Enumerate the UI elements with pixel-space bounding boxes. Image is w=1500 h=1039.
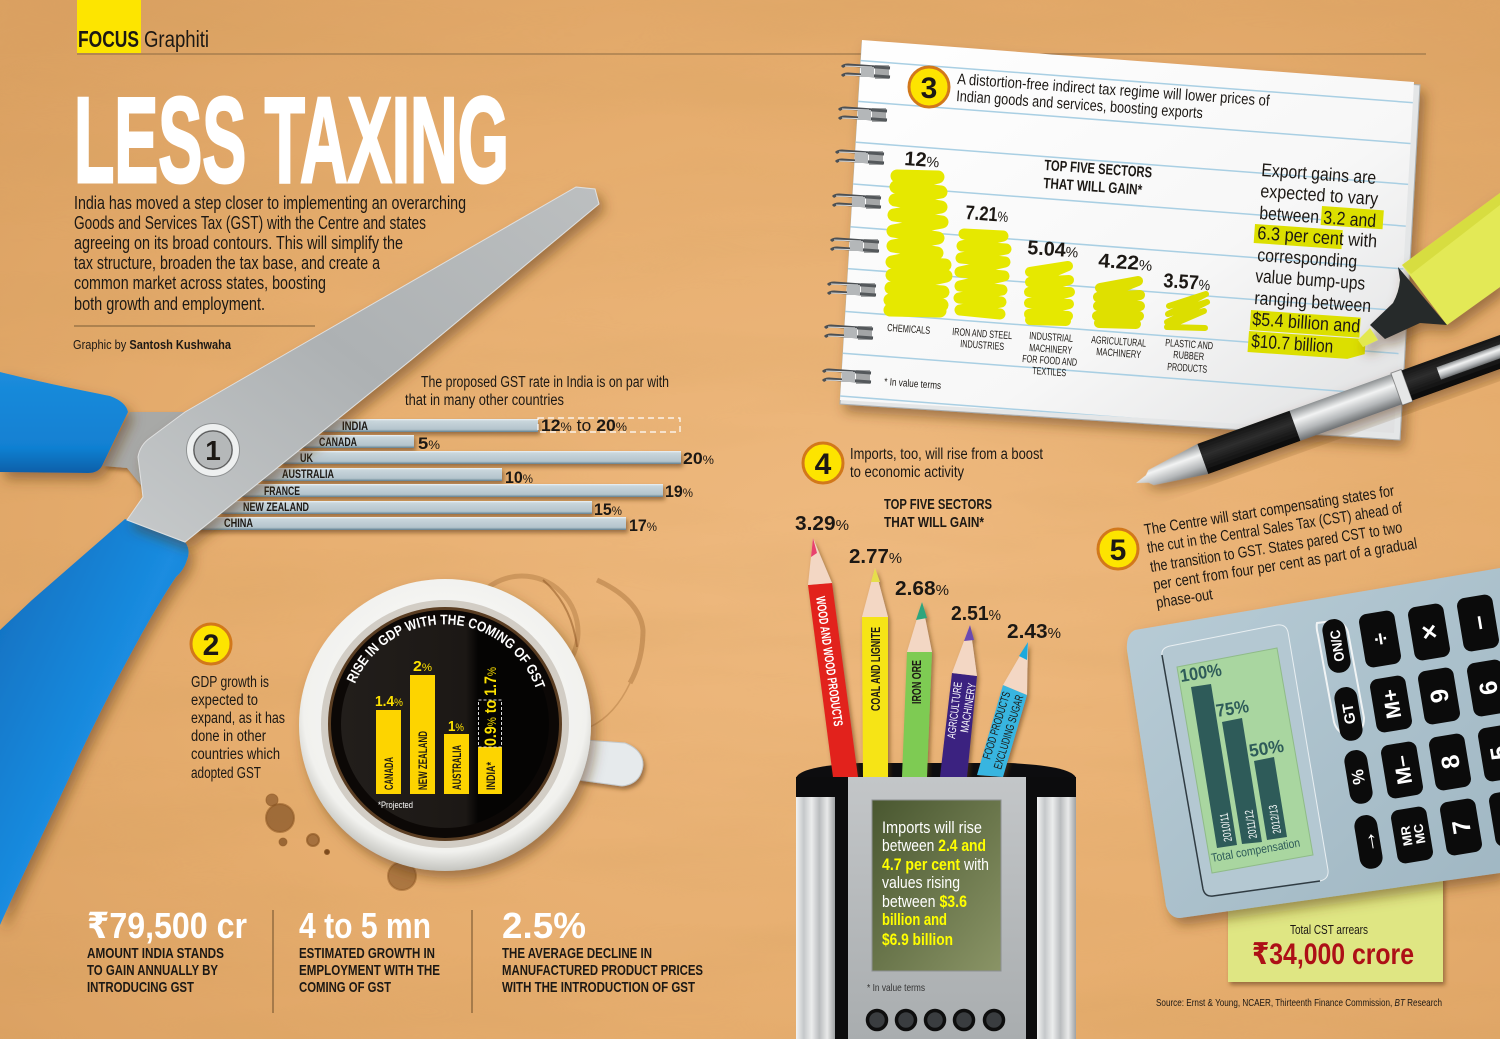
GDP bar chart: 2% bbox=[413, 658, 432, 675]
pivot screw with number 1: 1 bbox=[205, 435, 221, 466]
header: section label: Graphiti bbox=[144, 26, 209, 52]
notebook heading text: A distortion-free indirect tax regime will lower prices of bbox=[957, 71, 1271, 110]
pencil values: 2.43% bbox=[1007, 621, 1061, 643]
source line: Source: Ernst & Young, NCAER, Thirteenth Finance Commission, BT Research bbox=[1156, 997, 1442, 1009]
title: LESS TAXING bbox=[74, 72, 509, 208]
GDP explanatory text: done in other bbox=[191, 728, 266, 745]
GDP bar chart: 1.4% bbox=[375, 693, 403, 710]
calculator LCD chart: 75% bbox=[1214, 696, 1250, 721]
calculator keys: % bbox=[1348, 768, 1369, 786]
bar values: 7.21% bbox=[965, 202, 1009, 227]
GDP bar chart: CANADA bbox=[382, 757, 396, 790]
header: section label bbox=[77, 0, 1426, 54]
holder buttons bbox=[868, 1010, 1004, 1030]
calculator keys: MR bbox=[1397, 824, 1416, 847]
sector labels: PRODUCTS bbox=[1167, 361, 1208, 376]
stat: 79,500 crore: TO GAIN ANNUALLY BY bbox=[87, 962, 218, 979]
sector labels: FOR FOOD AND bbox=[1022, 353, 1078, 369]
export gains callout: 6.3 per cent with bbox=[1257, 222, 1378, 251]
number badge 4: 4 bbox=[815, 448, 832, 481]
intro text block: India has moved a step closer to implementing an overarching bbox=[74, 193, 466, 213]
panel 4: imports: EXCLUDING SUGAR bbox=[992, 694, 1026, 771]
bar values: 5% bbox=[418, 434, 440, 453]
bar values: 4.22% bbox=[1098, 250, 1153, 276]
number badge 3 bbox=[909, 67, 949, 107]
sector labels: INDUSTRIES bbox=[960, 338, 1005, 353]
calculator bbox=[1127, 568, 1500, 918]
bar values: 12% to 20% bbox=[541, 416, 627, 435]
panel 4: imports: AGRICULTURE bbox=[946, 681, 965, 739]
calculator keys: ÷ bbox=[1367, 631, 1394, 647]
GDP explanatory text bbox=[191, 674, 285, 782]
CST text bbox=[1143, 483, 1418, 612]
intro text block: common market across states, boosting bbox=[74, 273, 326, 293]
pencil labels: IRON ORE bbox=[909, 660, 924, 704]
export gains callout: corresponding bbox=[1257, 244, 1358, 272]
chart intro text: that in many other countries bbox=[405, 392, 564, 409]
key statistics row bbox=[87, 905, 703, 1013]
bar values: 5.04% bbox=[1027, 237, 1079, 263]
bar values: 19% bbox=[665, 482, 693, 501]
imports text: Imports, too, will rise from a boost bbox=[850, 446, 1044, 463]
stat: 79,500 crore: AMOUNT INDIA STANDS bbox=[87, 945, 224, 962]
sector labels: AGRICULTURAL bbox=[1091, 334, 1147, 350]
intro text block bbox=[74, 193, 466, 314]
stat: 2.5 percent bbox=[502, 905, 703, 996]
chart heading bbox=[1043, 157, 1153, 199]
chart heading: THAT WILL GAIN* bbox=[1043, 175, 1143, 199]
number badge 5: 5 bbox=[1110, 534, 1126, 567]
GDP bar chart: INDIA* bbox=[484, 762, 498, 790]
export gains callout: expected to vary bbox=[1260, 180, 1380, 209]
calculator LCD chart: 100% bbox=[1178, 660, 1223, 686]
country labels: INDIA bbox=[342, 421, 368, 433]
number badge 2: 2 bbox=[203, 629, 219, 662]
calculator keys: GT bbox=[1339, 702, 1360, 725]
GDP bar chart: 1% bbox=[448, 718, 464, 735]
holder footnote: * In value terms bbox=[867, 982, 925, 994]
imports chart heading: THAT WILL GAIN* bbox=[884, 514, 984, 531]
GDP bar chart: AUSTRALIA bbox=[450, 745, 464, 790]
calculator display bezel bbox=[1162, 625, 1328, 896]
GDP explanatory text: GDP growth is bbox=[191, 674, 269, 691]
chart intro text: The proposed GST rate in India is on par with bbox=[421, 374, 669, 391]
stat: 4 to 5 million bbox=[299, 905, 440, 996]
holder screen text: Imports will rise bbox=[882, 819, 982, 837]
notebook pages bbox=[840, 40, 1430, 441]
sticky note: ₹34,000 crore bbox=[1252, 938, 1414, 971]
calculator keys: M+ bbox=[1379, 687, 1406, 720]
intro text block: agreeing on its broad contours. This will simplify the bbox=[74, 233, 403, 253]
coffee stains bbox=[266, 576, 643, 890]
stat: 4 to 5 million: ESTIMATED GROWTH IN bbox=[299, 945, 435, 962]
pencil labels: WOOD AND WOOD PRODUCTS bbox=[813, 595, 846, 727]
country labels: CHINA bbox=[224, 518, 253, 530]
stat: 4 to 5 million: EMPLOYMENT WITH THE bbox=[299, 962, 440, 979]
sticky note bbox=[1228, 870, 1443, 982]
sector labels: IRON AND STEEL bbox=[952, 326, 1013, 342]
holder screen text: values rising bbox=[882, 874, 960, 892]
panel 1: GST rates bar chart with scissors bbox=[0, 187, 714, 925]
stat: 4 to 5 million: COMING OF GST bbox=[299, 979, 391, 996]
pen holder bbox=[796, 777, 1076, 1039]
pen holder back rim bbox=[796, 763, 1076, 800]
GDP bar chart: 0.9% to 1.7% bbox=[481, 667, 500, 746]
CST text: the transition to GST. States pared CST to two bbox=[1149, 519, 1403, 576]
GDP explanatory text: expand, as it has bbox=[191, 710, 285, 727]
imports text: to economic activity bbox=[850, 464, 964, 481]
bar values: 3.57% bbox=[1163, 270, 1211, 295]
GDP explanatory text: adopted GST bbox=[191, 765, 261, 782]
export gains callout: $5.4 billion and bbox=[1252, 308, 1361, 337]
imports chart heading: TOP FIVE SECTORS bbox=[884, 496, 992, 513]
highlighter bars bbox=[890, 176, 1207, 328]
sector labels: RUBBER bbox=[1173, 349, 1205, 363]
export gains callout: $10.7 billion bbox=[1251, 330, 1334, 357]
intro text block: Goods and Services Tax (GST) with the Centre and states bbox=[74, 213, 426, 233]
holder screen text: $6.9 billion bbox=[882, 931, 953, 949]
header: section label: FOCUS bbox=[78, 26, 139, 52]
panel 4: imports bbox=[795, 443, 1076, 1039]
intro text block: tax structure, broaden the tax base, and create a bbox=[74, 253, 381, 273]
calculator keys: 9 bbox=[1425, 687, 1455, 705]
dashed projection for India range bbox=[538, 418, 680, 432]
calculator keys: 8 bbox=[1436, 753, 1466, 771]
GDP bar chart bbox=[375, 658, 502, 811]
country labels: CANADA bbox=[319, 437, 357, 449]
imports chart heading bbox=[884, 496, 992, 531]
intro text block: both growth and employment. bbox=[74, 294, 265, 314]
pencils bbox=[808, 538, 1028, 777]
pencil values: 2.68% bbox=[895, 578, 949, 600]
steel bars bbox=[195, 419, 681, 530]
calculator LCD chart: 2012/13 bbox=[1268, 804, 1284, 834]
notebook heading text: Indian goods and services, boosting exports bbox=[956, 88, 1203, 122]
pencil values bbox=[795, 513, 1061, 643]
calculator LCD chart bbox=[1177, 648, 1313, 873]
GDP bar chart: *Projected bbox=[378, 800, 413, 811]
panel 4: imports: MACHINERY bbox=[959, 682, 979, 733]
GDP explanatory text: expected to bbox=[191, 692, 258, 709]
bar values: 12% bbox=[904, 148, 940, 172]
calculator keys: – bbox=[1462, 613, 1494, 633]
byline: Graphic by Santosh Kushwaha bbox=[73, 337, 232, 352]
holder screen text: 4.7 per cent with bbox=[882, 856, 989, 874]
stat: 2.5 percent: WITH THE INTRODUCTION OF GST bbox=[502, 979, 695, 996]
stat: 79,500 crore bbox=[87, 905, 247, 996]
holder screen text bbox=[882, 819, 989, 949]
stat: 2.5 percent: MANUFACTURED PRODUCT PRICES bbox=[502, 962, 703, 979]
calculator keys: ON/C bbox=[1326, 629, 1347, 663]
pencil values: 2.51% bbox=[951, 603, 1001, 625]
CST text: The Centre will start compensating states for bbox=[1143, 483, 1396, 539]
chart intro text bbox=[405, 374, 669, 409]
scissors bbox=[0, 187, 599, 925]
CST text: phase-out bbox=[1155, 586, 1214, 612]
curved chart heading: RISE IN GDP WITH THE COMING OF GST bbox=[346, 614, 546, 688]
pencil labels bbox=[813, 595, 924, 727]
sector labels: PLASTIC AND bbox=[1165, 337, 1214, 352]
country labels bbox=[224, 421, 368, 530]
sector labels: * In value terms bbox=[884, 376, 941, 392]
bar values bbox=[418, 416, 714, 535]
calculator keys: → bbox=[1353, 828, 1384, 856]
icon: highlighter pen bbox=[1358, 193, 1500, 347]
chart heading: TOP FIVE SECTORS bbox=[1044, 157, 1153, 182]
export gains callout bbox=[1248, 159, 1384, 360]
CST text: per cent from four per cent as part of a gradual bbox=[1152, 535, 1418, 594]
holder screen text: billion and bbox=[882, 911, 947, 929]
bar values bbox=[904, 148, 1211, 295]
calculator LCD chart: 2010/11 bbox=[1219, 812, 1235, 842]
stat: 79,500 crore: ₹79,500 cr bbox=[87, 905, 247, 946]
stat: 2.5 percent: 2.5% bbox=[502, 905, 586, 946]
number badge 4 bbox=[803, 443, 843, 483]
export gains callout: value bump-ups bbox=[1255, 265, 1366, 294]
calculator keys: M– bbox=[1390, 753, 1417, 786]
stat: 79,500 crore: INTRODUCING GST bbox=[87, 979, 194, 996]
bar values: 20% bbox=[683, 449, 714, 468]
sector labels bbox=[884, 322, 1214, 392]
calculator LCD chart: 50% bbox=[1247, 736, 1285, 761]
calculator keys bbox=[1317, 593, 1500, 871]
panel 3: notebook of exports bbox=[823, 40, 1500, 441]
country labels: AUSTRALIA bbox=[282, 469, 334, 481]
calculator LCD chart: 2011/12 bbox=[1244, 809, 1260, 839]
stat: 4 to 5 million: 4 to 5 mn bbox=[299, 905, 431, 946]
holder screen text: between $3.6 bbox=[882, 893, 967, 911]
country labels: UK bbox=[300, 453, 314, 465]
panel 4: imports: FOOD PRODUCTS bbox=[981, 690, 1013, 761]
export gains callout: between 3.2 and bbox=[1259, 202, 1377, 231]
export gains callout: ranging between bbox=[1254, 287, 1372, 316]
sector labels: CHEMICALS bbox=[887, 322, 931, 337]
panel 5: CST compensation bbox=[1098, 483, 1500, 982]
country labels: NEW ZEALAND bbox=[243, 502, 309, 514]
calculator keys: MC bbox=[1410, 822, 1428, 845]
country labels: FRANCE bbox=[264, 486, 300, 498]
pencil labels: COAL AND LIGNITE bbox=[868, 627, 883, 711]
sector labels: TEXTILES bbox=[1032, 365, 1067, 379]
pivot screw with number 1 bbox=[186, 423, 240, 477]
number badge 5 bbox=[1098, 529, 1138, 569]
sticky note: Total CST arrears bbox=[1290, 923, 1368, 937]
export gains callout: Export gains are bbox=[1261, 159, 1377, 188]
spiral binding bbox=[823, 65, 890, 384]
sector labels: MACHINERY bbox=[1029, 342, 1073, 357]
pencil values: 2.77% bbox=[849, 546, 902, 568]
stat: 2.5 percent: THE AVERAGE DECLINE IN bbox=[502, 945, 652, 962]
GDP bar chart: NEW ZEALAND bbox=[416, 731, 430, 790]
icon: ballpoint pen bbox=[1130, 325, 1500, 499]
panel 2: GDP growth bbox=[190, 574, 648, 891]
calculator LCD chart: Total compensation bbox=[1210, 836, 1301, 865]
sector labels: INDUSTRIAL bbox=[1029, 330, 1074, 345]
number badge 2 bbox=[191, 624, 231, 664]
imports text bbox=[850, 446, 1044, 481]
holder screen text: between 2.4 and bbox=[882, 837, 986, 855]
coffee cup with handle bbox=[299, 579, 643, 871]
bar values: 17% bbox=[629, 516, 657, 535]
sector labels: MACHINERY bbox=[1096, 346, 1142, 361]
bar values: 10% bbox=[505, 468, 533, 487]
GDP explanatory text: countries which bbox=[191, 746, 280, 763]
bar values: 15% bbox=[594, 500, 622, 519]
calculator keys: × bbox=[1413, 622, 1445, 642]
number badge 3: 3 bbox=[921, 72, 937, 105]
CST text: the cut in the Central Sales Tax (CST) ahead of bbox=[1146, 500, 1404, 557]
calculator keys: 7 bbox=[1447, 818, 1477, 836]
pencil values: 3.29% bbox=[795, 513, 849, 535]
